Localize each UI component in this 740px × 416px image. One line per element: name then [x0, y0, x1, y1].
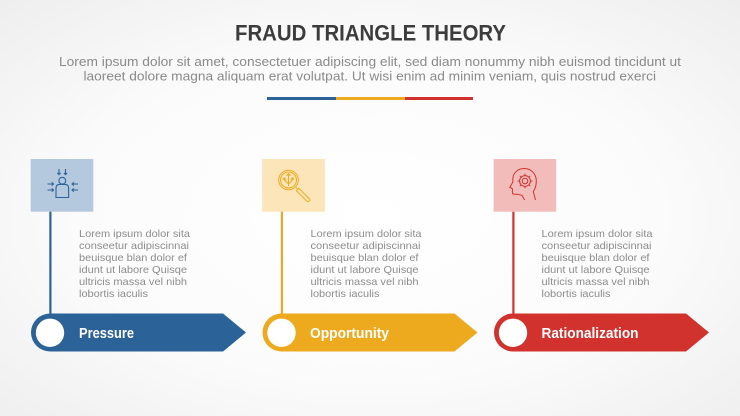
text block: opportunity: ultricis massa vel nibh — [310, 277, 419, 288]
title: FRAUD TRIANGLE THEORY — [235, 20, 506, 46]
label: pressure: Pressure — [79, 326, 134, 342]
arrow banner: rationalization — [494, 314, 709, 352]
text block: opportunity: Lorem ipsum dolor sita — [310, 229, 422, 240]
icon: magnifying glass with arrows — [279, 170, 310, 202]
text block: opportunity: lobortis iaculis — [310, 289, 380, 300]
arrow banner: opportunity — [262, 314, 478, 352]
subtitle text block: Lorem ipsum dolor sit amet, consectetuer adipiscing elit, sed diam nonummy nibh euismod tincidunt ut — [59, 54, 681, 69]
label: rationalization: Rationalization — [542, 326, 638, 342]
icon tile: rationalization — [494, 159, 556, 212]
icon: head with gear — [510, 168, 536, 200]
text block: opportunity: conseetur adipiscinnai — [310, 241, 420, 252]
text block: opportunity — [310, 229, 422, 300]
text block: pressure: beuisque blan dolor ef — [79, 253, 187, 264]
text block: rationalization: ultricis massa vel nibh — [542, 277, 650, 288]
text block: rationalization: beuisque blan dolor ef — [542, 253, 650, 264]
text block: rationalization: Lorem ipsum dolor sita — [542, 229, 653, 240]
connector line: opportunity — [281, 212, 283, 315]
panel: pressure — [31, 159, 246, 352]
text block: pressure: idunt ut labore Quisqe — [79, 265, 187, 276]
text block: pressure: Lorem ipsum dolor sita — [79, 229, 190, 240]
text block: pressure: conseetur adipiscinnai — [79, 241, 189, 252]
panel: opportunity — [262, 159, 478, 352]
icon: person under pressure — [48, 169, 78, 198]
text block: pressure: ultricis massa vel nibh — [79, 277, 187, 288]
icon tile: pressure — [31, 159, 93, 212]
icon tile: opportunity — [262, 159, 325, 212]
text block: opportunity: idunt ut labore Quisqe — [310, 265, 419, 276]
text block: rationalization: conseetur adipiscinnai — [542, 241, 652, 252]
arrow banner: pressure — [31, 314, 246, 352]
connector line: pressure — [49, 212, 52, 315]
text block: opportunity: beuisque blan dolor ef — [310, 253, 419, 264]
text block: rationalization: idunt ut labore Quisqe — [542, 265, 650, 276]
text block: pressure — [79, 229, 190, 300]
circle badge: opportunity — [267, 319, 296, 347]
connector line: rationalization — [512, 212, 514, 315]
subtitle text block: laoreet dolore magna aliquam erat volutpat. Ut wisi enim ad minim veniam, quis nostrud exerci — [84, 69, 656, 84]
text block: rationalization: lobortis iaculis — [542, 289, 610, 300]
text block: pressure: lobortis iaculis — [79, 289, 148, 300]
circle badge: rationalization — [499, 319, 527, 347]
panel: rationalization — [494, 159, 709, 352]
subtitle text block — [59, 54, 681, 84]
tri-colour title rule — [267, 97, 473, 100]
circle badge: pressure — [36, 319, 64, 347]
text block: rationalization — [542, 229, 653, 300]
label: opportunity: Opportunity — [310, 326, 389, 342]
